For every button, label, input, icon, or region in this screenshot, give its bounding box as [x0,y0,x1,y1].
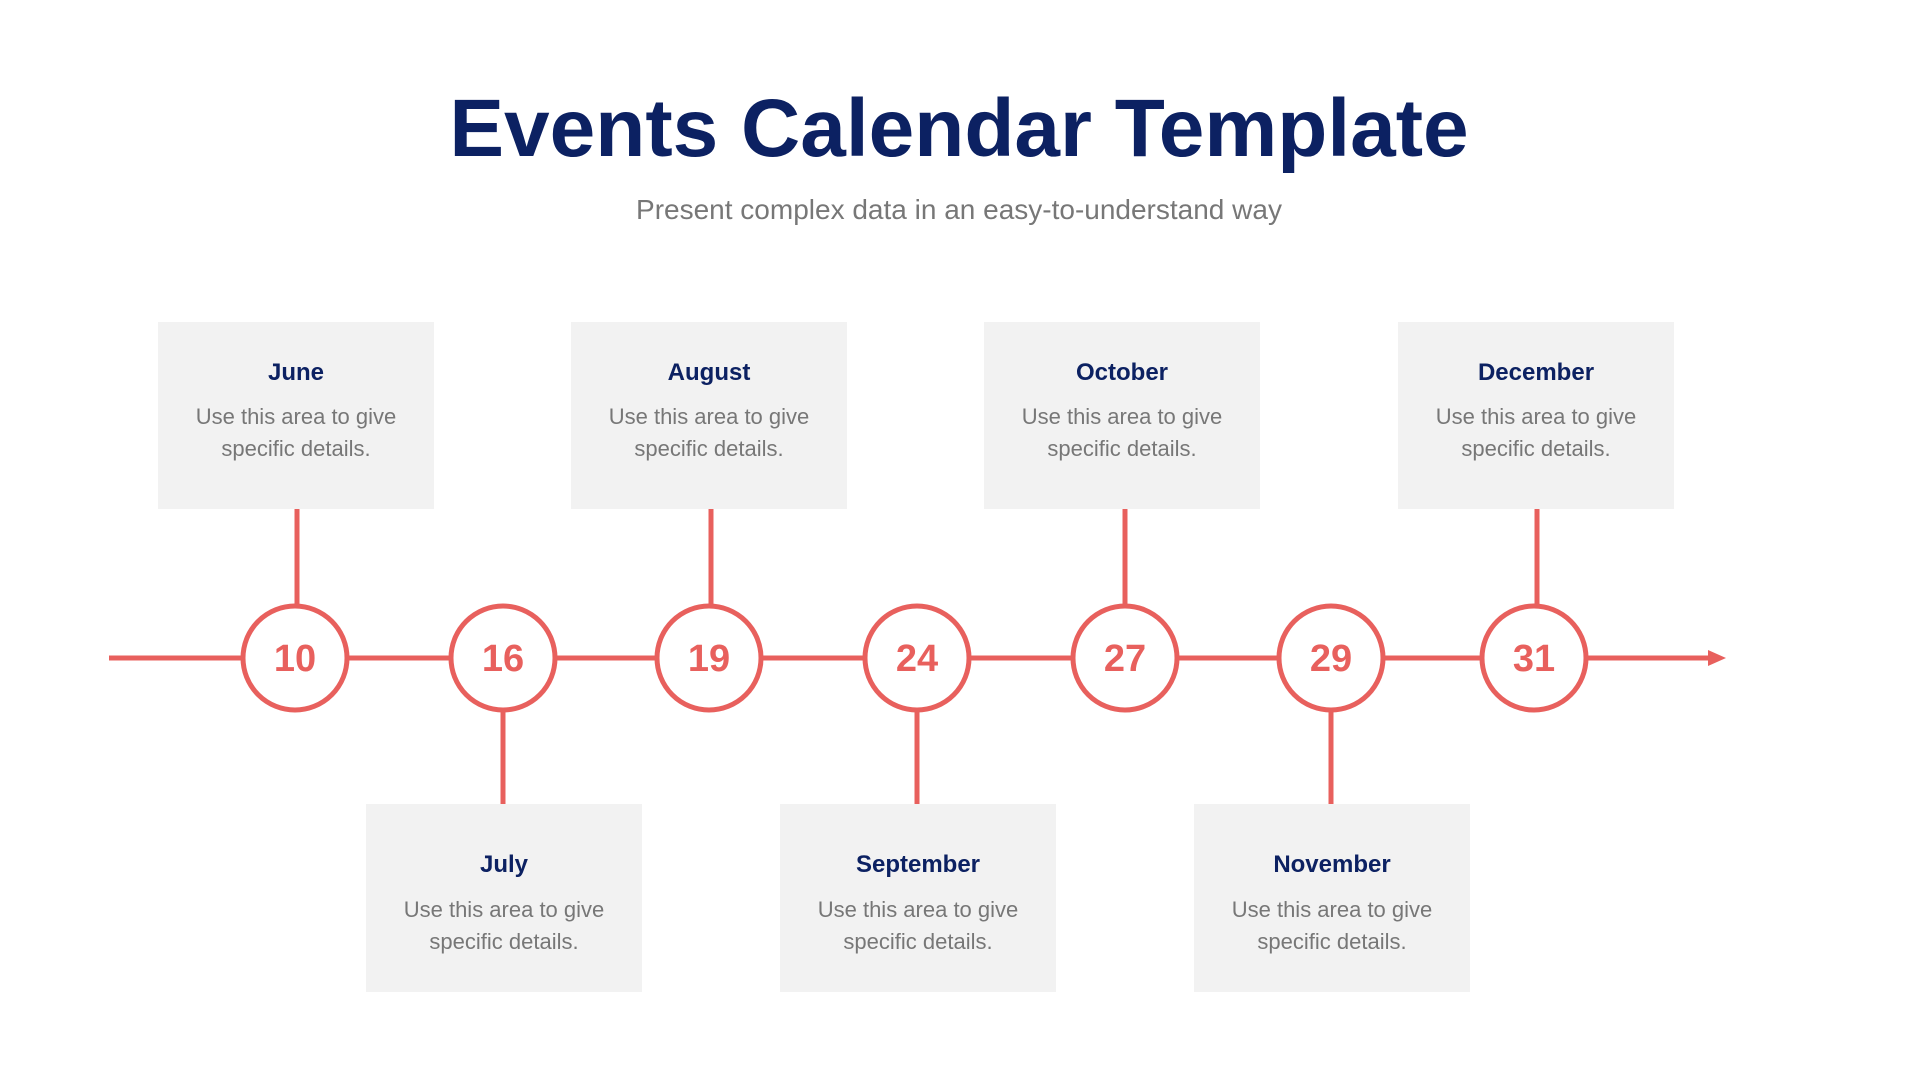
panel: June: specific details. [221,436,371,461]
panel: September: Use this area to give [818,897,1018,922]
panel: October [984,322,1260,509]
panel: June: Use this area to give [196,404,396,429]
panel: July: specific details. [429,929,579,954]
panel: November: Use this area to give [1232,897,1432,922]
timeline axis arrow [109,650,1726,666]
title: Events Calendar Template [449,83,1469,174]
panel: September: specific details. [843,929,993,954]
panel: August: Use this area to give [609,404,809,429]
panel: June [158,322,434,509]
date circles: 19 [688,638,730,680]
panel: July: July [480,851,529,878]
panel: December [1398,322,1674,509]
date circles: 29 [1310,638,1352,680]
panel: September [780,804,1056,992]
panel: December: Use this area to give [1436,404,1636,429]
panel: August: August [668,359,750,386]
panel: August: specific details. [634,436,784,461]
connectors [297,509,1537,804]
panel: October: October [1076,359,1168,386]
panel: December: specific details. [1461,436,1611,461]
date circles: 31 [1513,638,1555,680]
panel: July [366,804,642,992]
date circles: 10 [274,638,316,680]
panel: December: December [1478,359,1594,386]
panel: November: specific details. [1257,929,1407,954]
panel: August [571,322,847,509]
panel: November: November [1273,851,1391,878]
date circles [243,606,1586,710]
subtitle: Present complex data in an easy-to-understand way [636,194,1282,225]
panel: October: Use this area to give [1022,404,1222,429]
panel: September: September [856,851,980,878]
panel: June: June [268,359,324,386]
date circles: 24 [896,638,938,680]
panel: November [1194,804,1470,992]
panel: October: specific details. [1047,436,1197,461]
panel: July: Use this area to give [404,897,604,922]
date circles: 16 [482,638,524,680]
date circles: 27 [1104,638,1146,680]
